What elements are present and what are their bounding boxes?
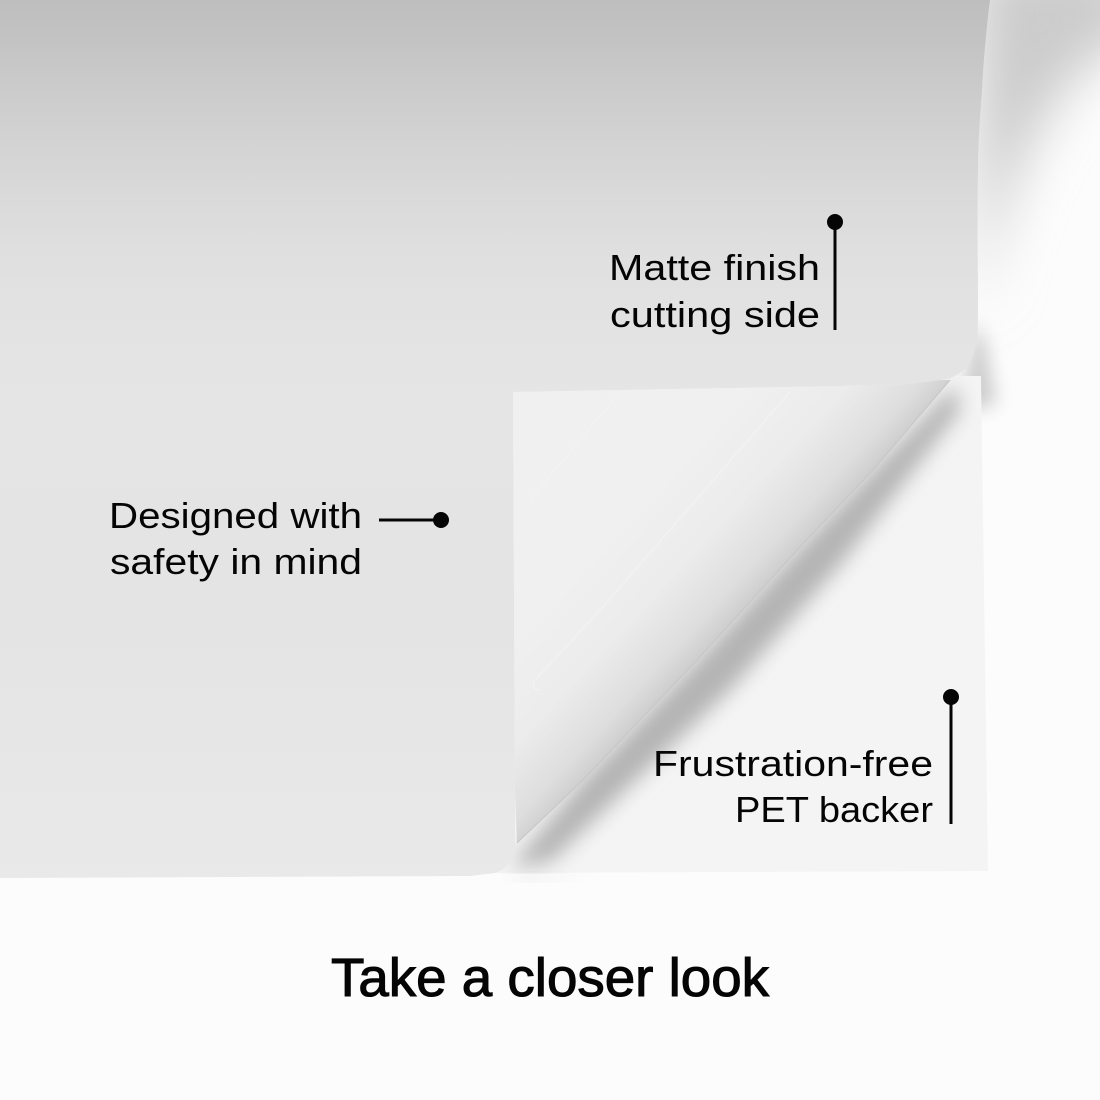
- callout: matte finish: [609, 214, 843, 335]
- callout text: safety: [109, 495, 362, 582]
- backer sheet: [480, 376, 988, 873]
- callout text: safety: Designed with: [109, 495, 362, 536]
- flap shadow on backer: [510, 385, 960, 868]
- pin marker: matte finish: [827, 214, 843, 330]
- callout text: PET backer: PET backer: [735, 789, 933, 830]
- callout text: matte finish: [609, 247, 820, 335]
- callout: safety: [109, 495, 449, 582]
- shadow under backer bottom: [505, 874, 590, 880]
- title: Take a closer look: [331, 948, 770, 1008]
- callout: PET backer: [653, 689, 959, 830]
- pin marker: safety: [379, 512, 449, 528]
- callout text: matte finish: Matte finish: [609, 247, 820, 288]
- callout text: PET backer: Frustration-free: [653, 743, 933, 784]
- callout text: safety: safety in mind: [110, 541, 362, 582]
- sheet: matte cutting side: [0, 0, 990, 878]
- soft shadow right of sheet: [960, 0, 1100, 410]
- callout text: matte finish: cutting side: [610, 294, 820, 335]
- callout text: PET backer: [653, 743, 933, 830]
- peeled flap: adhesive side: [513, 380, 950, 843]
- pin marker: PET backer: [943, 689, 959, 824]
